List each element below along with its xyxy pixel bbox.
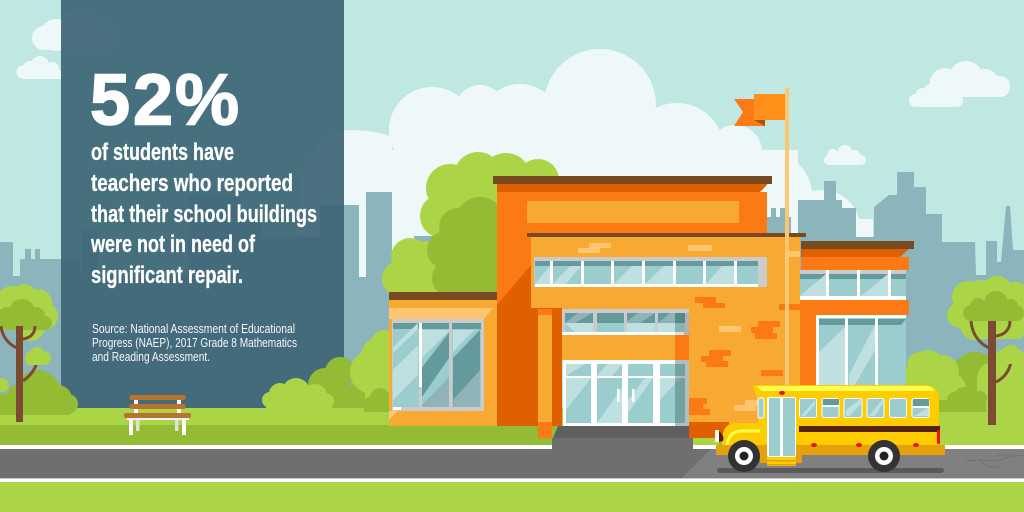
- statistic description: significant repair.: [91, 262, 243, 289]
- upper window band: [534, 257, 767, 287]
- statistic description: [90, 139, 317, 289]
- middle window: [562, 309, 689, 360]
- bench: [124, 395, 191, 435]
- front doors: [563, 360, 689, 426]
- road: [0, 445, 1024, 482]
- ground: dark grass: [0, 425, 940, 446]
- headline: 52%: 52%: [90, 60, 239, 140]
- statistic description: were not in need of: [90, 231, 256, 258]
- central block with bricks: [527, 233, 806, 438]
- small clouds right: [824, 61, 1010, 165]
- rear wheel: [868, 440, 900, 472]
- bus lights: [779, 391, 940, 447]
- statistic description: that their school buildings: [91, 201, 317, 228]
- statistic description: of students have: [91, 139, 234, 166]
- entrance steps: [552, 426, 693, 449]
- bus shadow: [717, 468, 944, 473]
- school building: [389, 176, 914, 449]
- large cloud behind school: [298, 49, 873, 290]
- left wing: [389, 292, 498, 426]
- ground: light grass: [0, 408, 1024, 446]
- statistic description: teachers who reported: [91, 170, 293, 197]
- source note: [92, 322, 297, 364]
- panel: statistic: [61, 0, 344, 408]
- pillar: [538, 309, 552, 438]
- bus windows: [758, 398, 929, 418]
- source note: Source: National Assessment of Educational: [92, 322, 295, 336]
- small clouds left: [16, 9, 119, 79]
- source note: Progress (NAEP), 2017 Grade 8 Mathematics: [92, 336, 297, 350]
- right wing: [800, 241, 914, 395]
- source note: and Reading Assessment.: [92, 350, 210, 364]
- ground: front lawn: [0, 482, 1024, 512]
- tree left: [0, 284, 78, 422]
- main tower: [493, 176, 772, 426]
- bushes left of school: [262, 330, 400, 412]
- tree and bushes right: [906, 276, 1024, 425]
- school bus: [715, 385, 945, 473]
- bus body: [752, 385, 939, 445]
- city skyline: [0, 172, 1024, 422]
- front wheel: [728, 440, 760, 472]
- bus lower band: [716, 445, 945, 463]
- flag and pole: [734, 88, 789, 385]
- bus door: [767, 397, 796, 466]
- bushes behind school: [382, 152, 559, 300]
